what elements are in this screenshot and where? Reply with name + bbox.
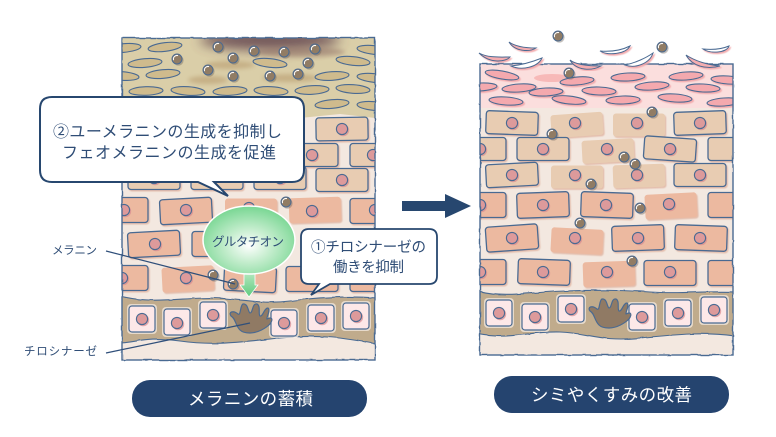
glutathione label: グルタチオン: [212, 235, 284, 249]
callout text line 2: 働きを抑制: [333, 259, 404, 276]
basal layer band: [478, 290, 735, 339]
green arrow: [240, 272, 258, 297]
glutathione bubble with arrow: [203, 206, 295, 297]
callout text line 1: ②ユーメラニンの生成を抑制し: [53, 123, 282, 141]
callout text line 2: フェオメラニンの生成を促進: [62, 144, 276, 162]
panel: melanin accumulation skin section: [120, 36, 376, 362]
callout: melanin production: [40, 97, 304, 196]
clipped skin contents: [480, 64, 733, 355]
melanin granules in lower layer: [208, 197, 293, 291]
pink flattened cells: [463, 68, 745, 107]
melanin granules: [547, 31, 669, 268]
epidermal cells: [122, 116, 375, 296]
pill: melanin accumulation: [132, 380, 367, 417]
basal cells: [127, 300, 371, 338]
basal layer band: [120, 296, 377, 344]
panel outline: [480, 64, 733, 355]
green ellipse: [203, 206, 295, 274]
label: tyrosinase: [24, 323, 250, 358]
pill: improvement of spots and dullness: [494, 376, 729, 413]
upper horny layer with dark staining: [122, 30, 375, 118]
panel outline: [122, 38, 375, 360]
clipped skin contents: [122, 38, 375, 360]
panel: improved skin section: [478, 30, 734, 356]
tyrosinase melanocyte: [230, 304, 272, 333]
peeling flakes: [479, 42, 729, 69]
callout text line 1: ①チロシナーゼの: [311, 239, 426, 256]
pill: improvement of spots and dullness: シミやくすみの改善: [531, 385, 692, 405]
label: tyrosinase: チロシナーゼ: [24, 345, 97, 358]
melanin granules in upper layer: [172, 42, 322, 83]
label: melanin: [52, 245, 235, 284]
cells: [480, 110, 733, 290]
pink upper layer: [480, 64, 733, 108]
flattened cells in upper layer: [122, 42, 375, 111]
arrow: before to after: [402, 194, 471, 218]
pill: melanin accumulation: メラニンの蓄積: [188, 389, 313, 409]
basal cells: [484, 294, 729, 332]
callout: tyrosinase inhibition: [301, 229, 437, 295]
tyrosinase melanocyte: [589, 299, 631, 328]
label: melanin: メラニン: [52, 245, 97, 257]
